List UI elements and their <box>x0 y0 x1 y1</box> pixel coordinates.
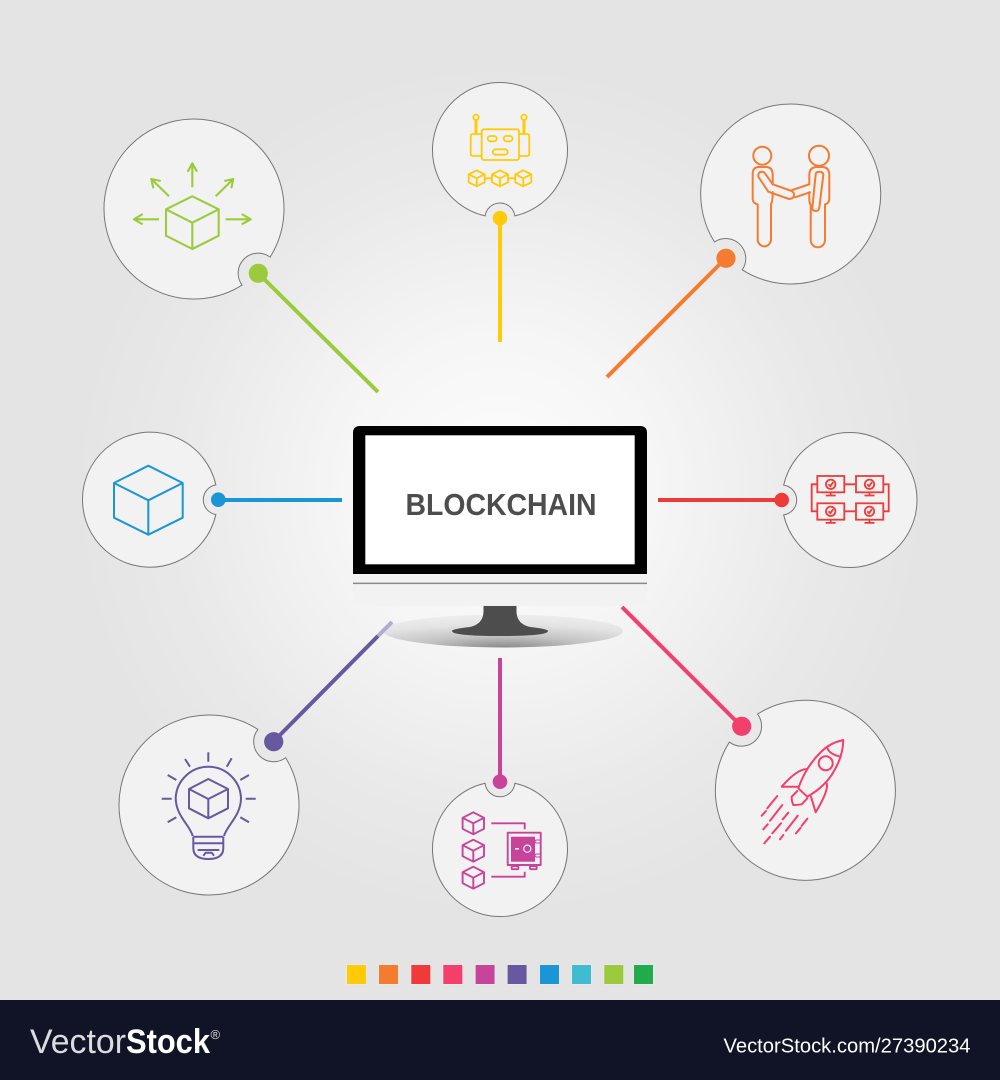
node: blue cube <box>83 432 226 567</box>
icon: cube with arrows <box>134 163 251 249</box>
node circle <box>104 119 284 299</box>
icon: bulb with cube <box>162 752 256 859</box>
node dot <box>493 774 507 789</box>
line: red <box>658 498 781 502</box>
node: magenta cubes and safe <box>432 774 567 917</box>
monitor bezel <box>353 426 647 574</box>
icon: rocket <box>762 740 843 843</box>
node circle <box>119 715 299 895</box>
node dot <box>493 211 507 226</box>
node circle <box>701 104 881 284</box>
node: purple light bulb <box>119 715 299 895</box>
icon: cube <box>114 466 183 535</box>
icon: monitor network <box>812 476 889 523</box>
node: pink rocket <box>715 700 895 880</box>
central monitor <box>353 426 647 648</box>
monitor stand <box>452 606 548 636</box>
node circle <box>83 432 216 567</box>
monitor title: BLOCKCHAIN <box>406 487 596 522</box>
node circle <box>432 783 567 917</box>
connector lines <box>218 218 781 781</box>
footer logo: Stock <box>126 1023 210 1061</box>
line: blue <box>218 498 342 502</box>
node dot <box>211 492 226 507</box>
line: purple <box>274 622 392 741</box>
node circle <box>432 83 568 216</box>
line: orange <box>607 258 726 377</box>
line: magenta <box>498 658 502 781</box>
footer logo: ® <box>210 1027 220 1042</box>
colour swatches <box>347 965 653 984</box>
line: yellow <box>498 218 502 342</box>
node: yellow robot <box>432 83 568 226</box>
icon: handshake <box>753 146 829 247</box>
node: green expanding cube <box>104 119 284 299</box>
node dot <box>732 717 751 736</box>
line: green <box>258 273 378 392</box>
node dot <box>716 249 736 268</box>
footer logo <box>30 1023 220 1061</box>
node dot <box>264 732 283 751</box>
node circle <box>784 432 917 568</box>
node dot <box>774 493 789 507</box>
line: pink <box>622 607 741 726</box>
stand shadow <box>383 614 623 648</box>
safe door <box>511 837 540 862</box>
footer image id: VectorStock.com/27390234 <box>724 1036 970 1058</box>
footer logo: Vector <box>30 1023 126 1061</box>
monitor chin <box>353 574 647 606</box>
node: red networked monitors <box>774 432 917 568</box>
node circle <box>715 700 895 880</box>
node dot <box>249 264 268 283</box>
icon: cubes into safe <box>463 812 541 889</box>
icon: robot and chain <box>469 115 531 186</box>
footer bar <box>0 1000 1000 1080</box>
node: orange handshake <box>701 104 881 284</box>
monitor screen <box>365 435 635 564</box>
